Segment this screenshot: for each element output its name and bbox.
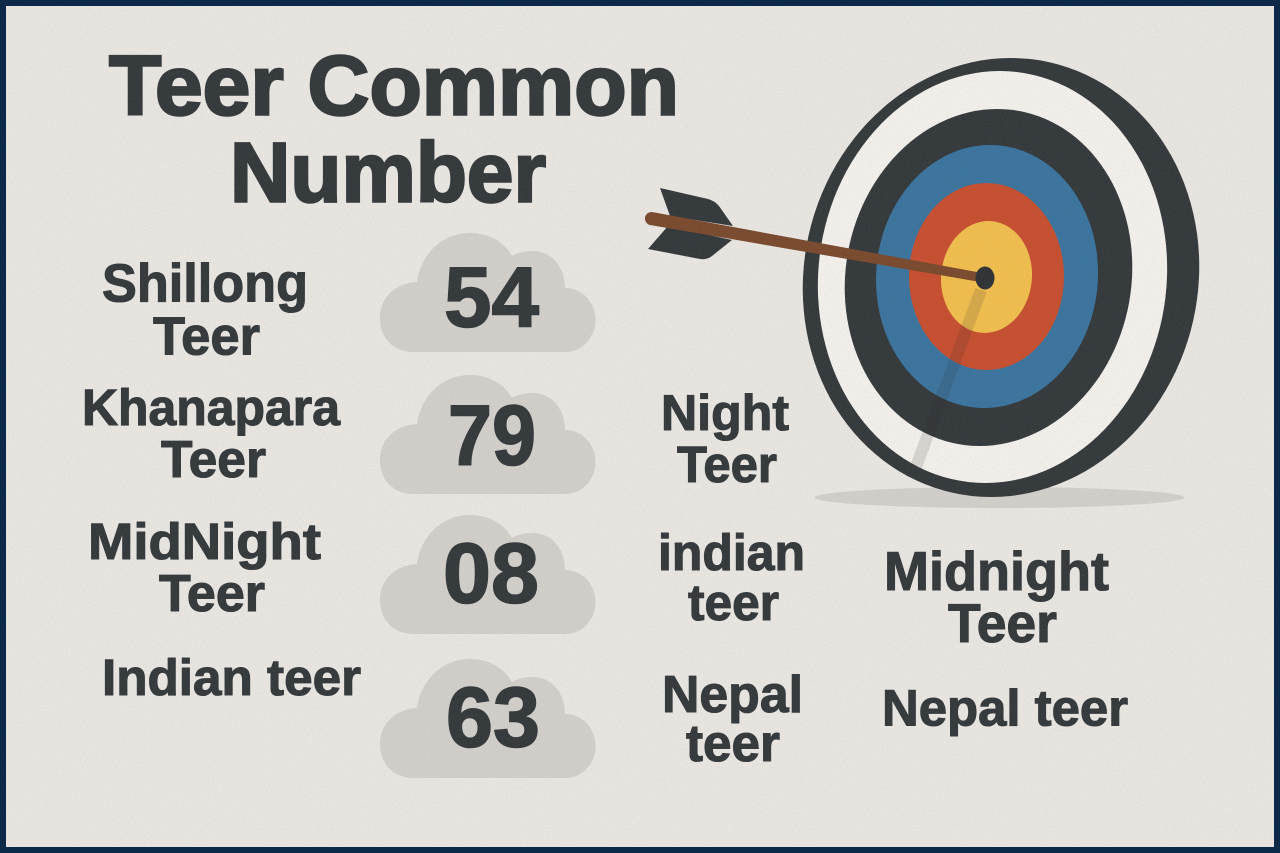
icon: arrow: [645, 188, 994, 290]
label: Nepal teer stacked: [662, 666, 803, 773]
outer dark ring: [793, 58, 1209, 497]
label: Shillong Teer: Teer: [153, 306, 260, 366]
cloud with number 54: [380, 233, 596, 352]
label: indian teer: [658, 524, 805, 631]
label: MidNight Teer: MidNight: [88, 513, 321, 570]
label: Night Teer: Night: [661, 385, 789, 441]
label: Nepal teer: Nepal teer: [882, 680, 1128, 736]
cloud with number 63: [380, 659, 596, 778]
label: indian teer: teer: [688, 574, 779, 631]
cloud with number 79: 79: [448, 388, 536, 484]
label: Khanapara Teer: Khanapara: [82, 379, 341, 436]
label: Shillong Teer: Shillong: [102, 254, 308, 314]
inner dark ring: [836, 109, 1141, 446]
white ring: [811, 71, 1174, 483]
label: Night Teer: Teer: [677, 436, 777, 493]
label: Nepal teer stacked: teer: [686, 715, 780, 773]
cloud with number 08: 08: [443, 526, 539, 622]
yellow centre: [939, 221, 1034, 333]
ground shadow: [814, 487, 1184, 508]
label: Midnight Teer: Midnight: [884, 540, 1109, 602]
label: Khanapara Teer: Teer: [161, 431, 266, 489]
label: Midnight Teer: [884, 540, 1109, 654]
title: [109, 38, 679, 220]
label: MidNight Teer: [88, 513, 321, 623]
label: Night Teer: [661, 385, 789, 493]
label: Nepal teer stacked: Nepal: [662, 666, 803, 724]
label: Indian teer: Indian teer: [102, 649, 361, 706]
label: Midnight Teer: Teer: [948, 592, 1057, 654]
cloud with number 79: [380, 375, 596, 494]
arrow cast shadow: [916, 290, 981, 467]
blue ring: [873, 145, 1101, 408]
title: Teer Common: [109, 38, 679, 132]
title: Number: [230, 126, 546, 220]
fletching: [660, 188, 733, 226]
cloud with number 54: 54: [444, 250, 539, 346]
red ring: [909, 183, 1064, 370]
cloud with number 63: 63: [446, 670, 540, 766]
label: Shillong Teer: [102, 254, 308, 366]
label: Khanapara Teer: [82, 379, 341, 489]
icon: archery target: [793, 58, 1209, 508]
shaft: [645, 212, 985, 282]
label: indian teer: indian: [658, 524, 805, 581]
arrow tip hub: [976, 266, 994, 290]
label: MidNight Teer: Teer: [159, 565, 265, 623]
cloud with number 08: [380, 515, 596, 634]
